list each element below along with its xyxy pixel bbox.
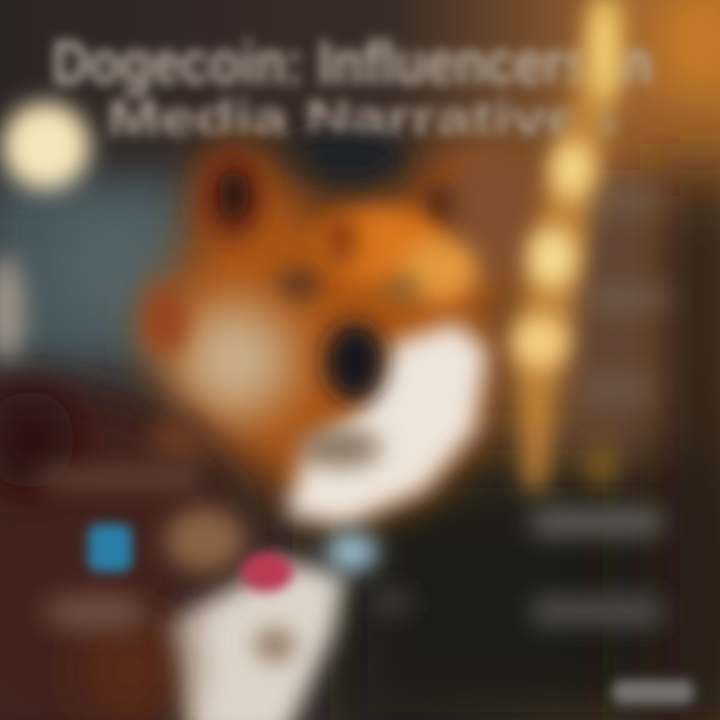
dog xyxy=(140,147,540,720)
right ear xyxy=(440,147,540,283)
glowing orb xyxy=(2,102,90,190)
cheek xyxy=(177,302,293,418)
pink collar xyxy=(241,552,293,592)
light blue collar xyxy=(326,532,378,572)
nose xyxy=(325,322,385,402)
dog head fur xyxy=(140,150,530,520)
left ear xyxy=(198,147,266,243)
blue accent xyxy=(88,524,132,572)
light column xyxy=(512,0,630,490)
chest xyxy=(155,560,345,720)
foreground arm xyxy=(0,385,250,720)
side text blocks xyxy=(580,190,670,405)
title: Media Narratives xyxy=(107,90,617,146)
forehead xyxy=(318,207,442,283)
eyes xyxy=(276,270,320,300)
white muzzle xyxy=(285,322,488,525)
yellow marker xyxy=(586,445,616,485)
title xyxy=(52,29,652,146)
button xyxy=(612,680,694,704)
lower text blocks xyxy=(375,508,662,626)
mouth shade xyxy=(298,428,382,468)
dark shape behind dog head xyxy=(272,134,408,186)
